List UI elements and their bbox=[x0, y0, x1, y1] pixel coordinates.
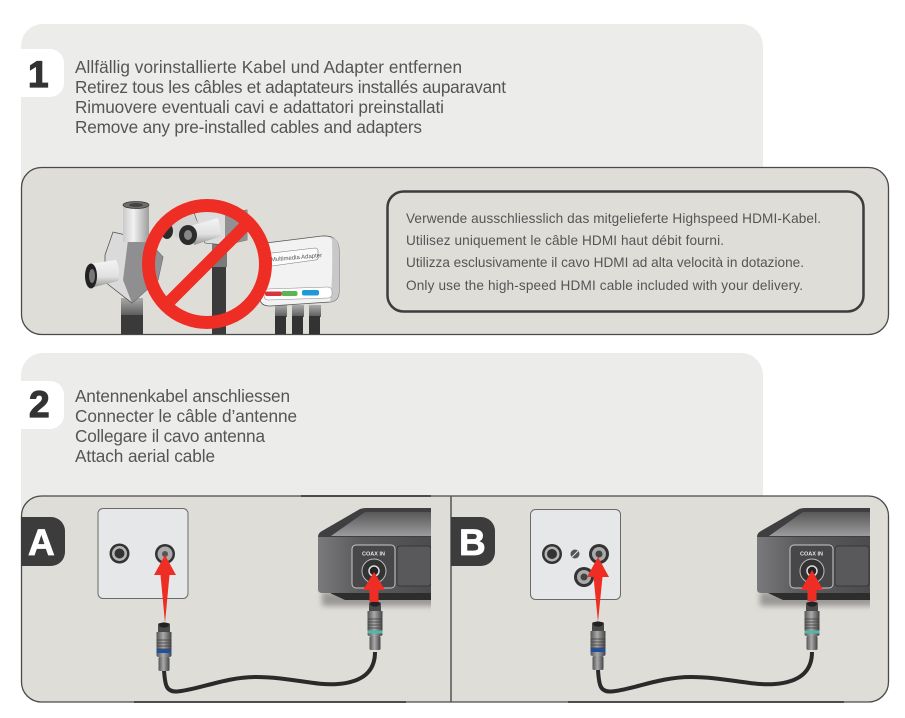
badge: step 2 number bbox=[21, 381, 64, 429]
badge: option B: B bbox=[459, 522, 486, 563]
icon: set-top box with COAX IN port bbox=[318, 508, 437, 606]
badge: option B bbox=[451, 517, 495, 566]
icon: multimedia adapter box: Multimedia Adapter bbox=[271, 253, 322, 263]
callout: included HDMI cable notice: Verwende ausschliesslich das mitgelieferte Highspeed HDMI-Kabel. bbox=[406, 211, 821, 226]
heading: step 2 multilingual instructions: Attach aerial cable bbox=[75, 446, 215, 466]
panel: option A wall socket connection bbox=[21, 508, 437, 692]
icon: coaxial cable with connectors bbox=[590, 601, 820, 692]
heading: step 1 multilingual instructions: Retirez tous les câbles et adaptateurs installés auparavant bbox=[75, 77, 506, 97]
icon: wall plate with three sockets bbox=[530, 510, 620, 600]
panel: step 1 header bbox=[21, 24, 763, 185]
icon: red prohibition sign bbox=[148, 206, 266, 322]
panel: step 1 illustration bbox=[22, 168, 888, 334]
callout: included HDMI cable notice bbox=[388, 192, 864, 312]
icon: twin plug adapter bbox=[161, 210, 247, 334]
heading: step 1 multilingual instructions bbox=[75, 57, 506, 137]
heading: step 1 multilingual instructions: Remove any pre-installed cables and adapters bbox=[75, 117, 422, 137]
badge: step 1 number bbox=[21, 49, 64, 97]
arrow: to wall socket bbox=[154, 555, 176, 623]
badge: option A: A bbox=[28, 522, 55, 563]
icon: antenna splitter adapter bbox=[85, 202, 163, 334]
heading: step 1 multilingual instructions: Allfällig vorinstallierte Kabel und Adapter entfernen bbox=[75, 57, 462, 77]
panel: step 2 header bbox=[21, 353, 763, 514]
heading: step 2 multilingual instructions bbox=[75, 386, 297, 466]
arrow: to COAX IN port bbox=[801, 570, 823, 601]
callout: included HDMI cable notice: Only use the high-speed HDMI cable included with your delivery. bbox=[406, 278, 803, 293]
callout: included HDMI cable notice: Utilisez uniquement le câble HDMI haut débit fourni. bbox=[406, 233, 724, 248]
icon: set-top box with COAX IN port bbox=[757, 508, 875, 606]
icon: set-top box with COAX IN port: COAX IN bbox=[800, 552, 823, 558]
badge: step 2 number: 2 bbox=[29, 384, 50, 425]
badge: option A bbox=[21, 517, 65, 566]
icon: multimedia adapter box bbox=[260, 236, 339, 334]
icon: set-top box with COAX IN port: COAX IN bbox=[362, 552, 385, 558]
heading: step 2 multilingual instructions: Collegare il cavo antenna bbox=[75, 426, 265, 446]
icon: wall plate with two sockets bbox=[98, 508, 188, 598]
heading: step 1 multilingual instructions: Rimuovere eventuali cavi e adattatori preinstallati bbox=[75, 97, 444, 117]
heading: step 2 multilingual instructions: Antennenkabel anschliessen bbox=[75, 386, 290, 406]
arrow: to COAX IN port bbox=[363, 572, 385, 602]
icon: coaxial cable with connectors bbox=[156, 601, 382, 692]
arrow: to wall socket bbox=[587, 557, 609, 622]
heading: step 2 multilingual instructions: Connecter le câble d’antenne bbox=[75, 406, 297, 426]
panel: step 2 illustration background bbox=[22, 496, 888, 702]
badge: step 1 number: 1 bbox=[28, 54, 49, 95]
callout: included HDMI cable notice: Utilizza esclusivamente il cavo HDMI ad alta velocità in dotazione. bbox=[406, 255, 804, 270]
panel: option B wall socket connection bbox=[451, 508, 875, 692]
